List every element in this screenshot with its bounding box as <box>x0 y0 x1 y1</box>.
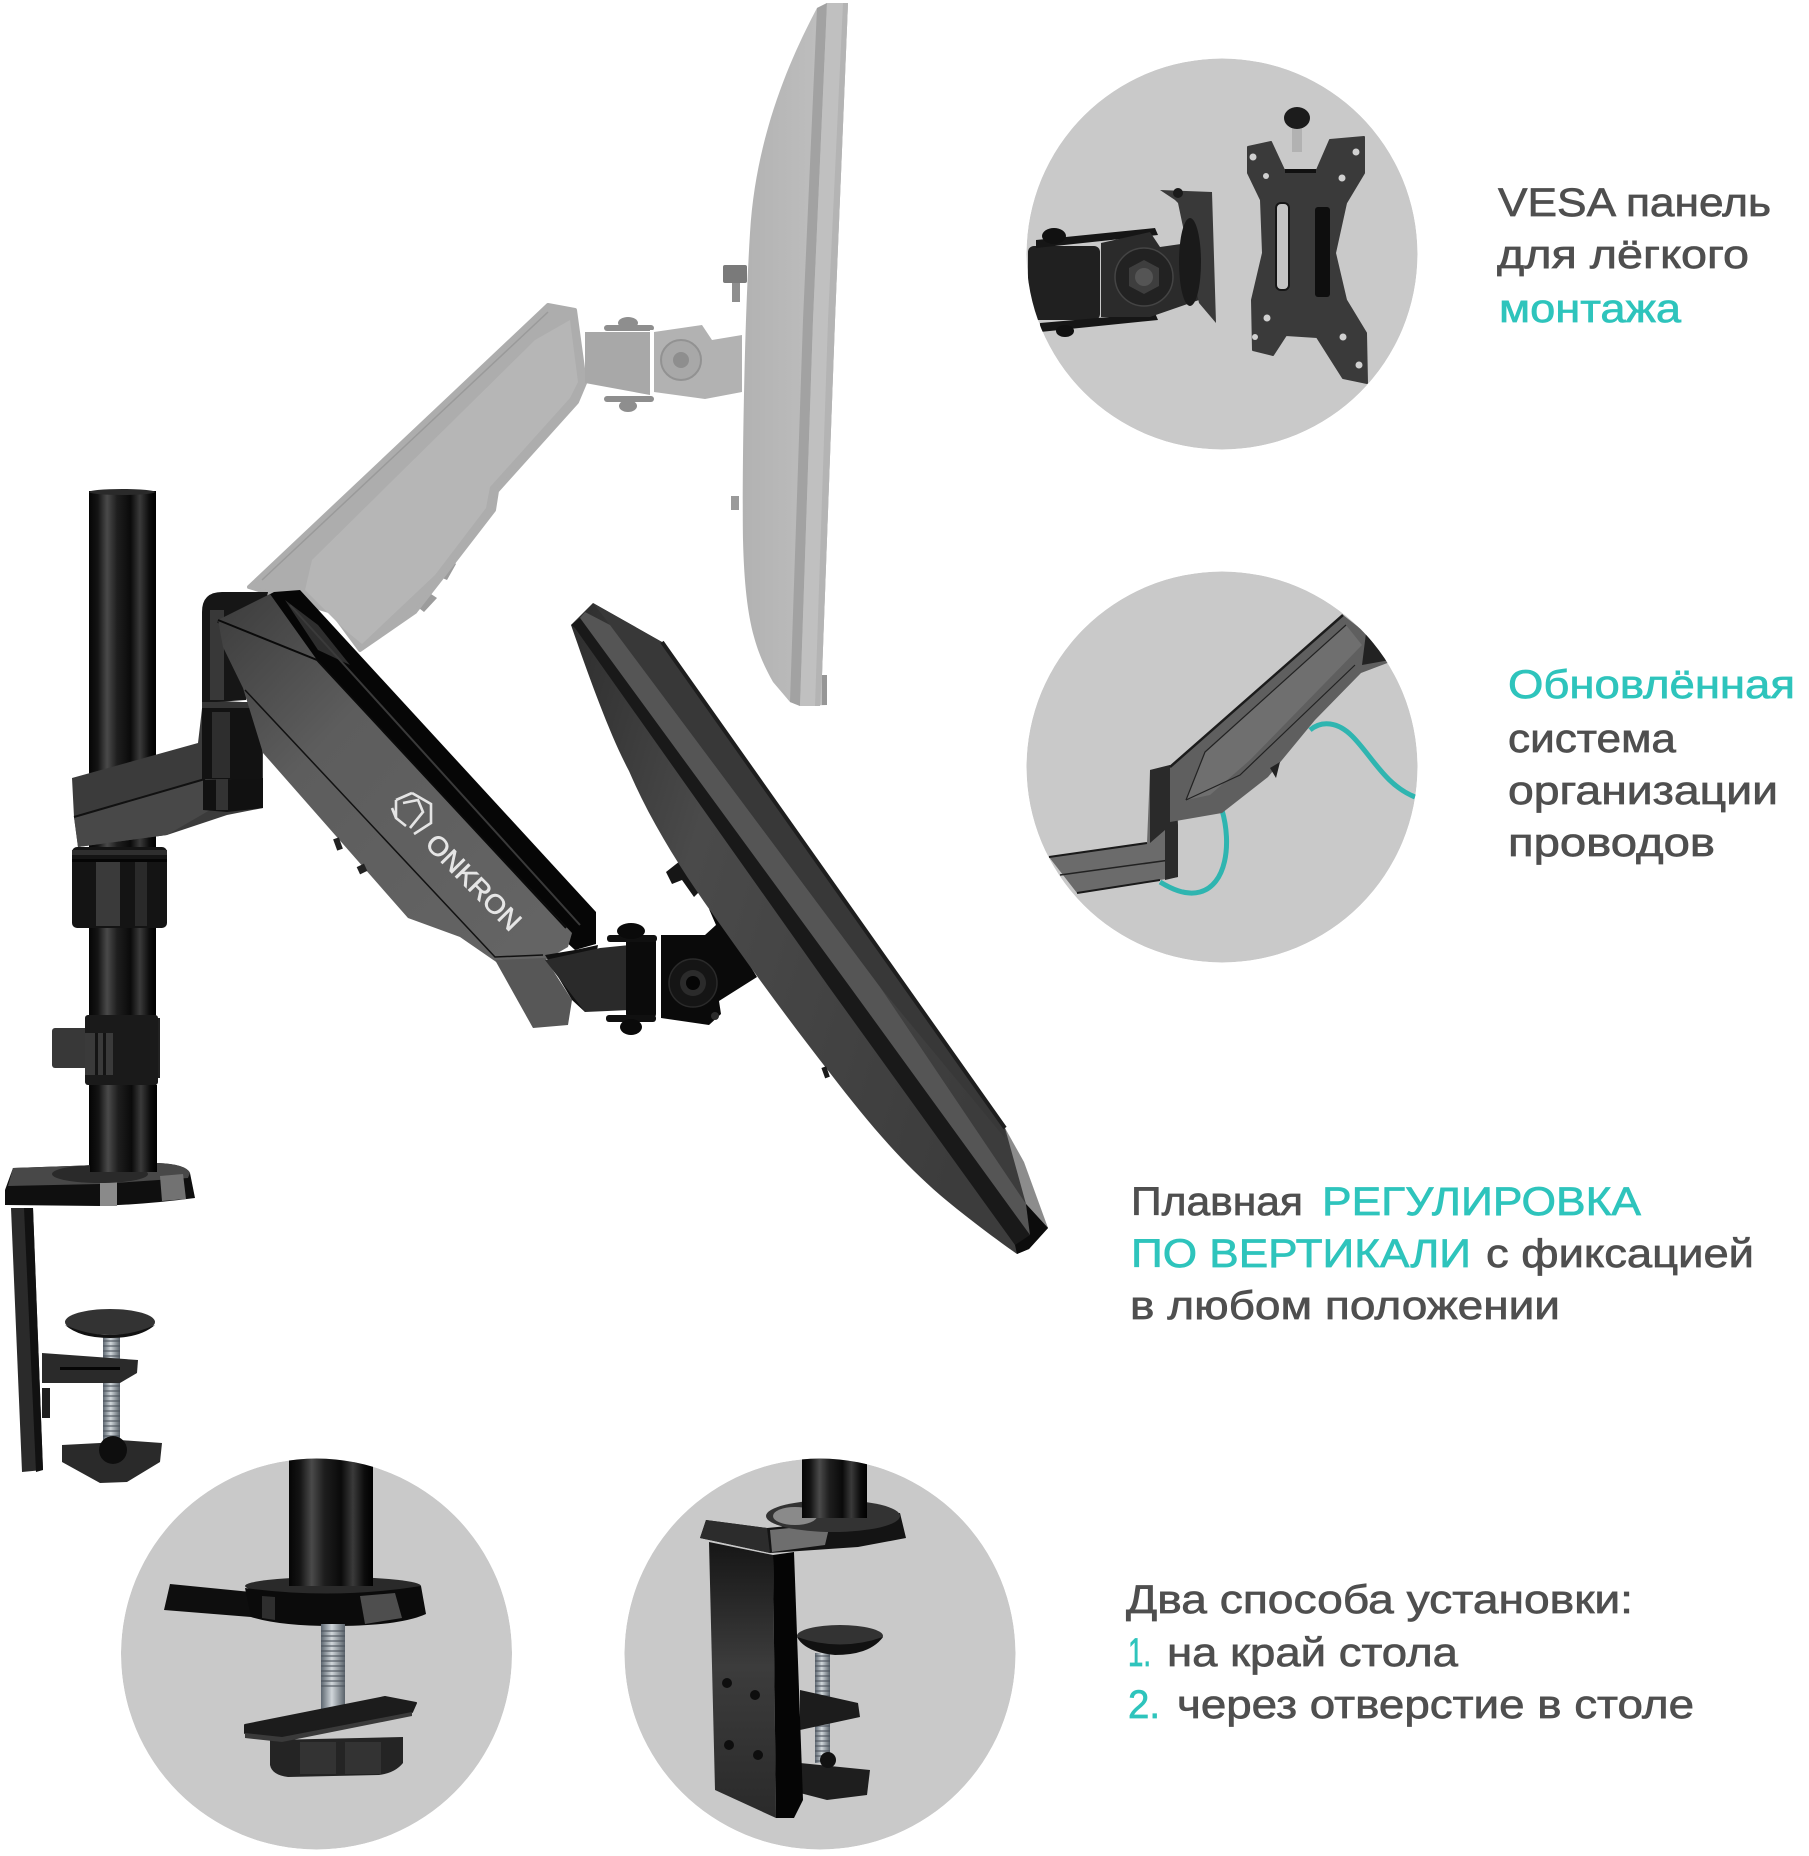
lower swing arm <box>72 700 263 847</box>
icon: lower clamp screw <box>797 1625 883 1800</box>
panel: cable management circle <box>1026 572 1418 962</box>
installation methods caption: через отверстие в столе <box>1177 1683 1694 1727</box>
vertical adjustment caption: ПО ВЕРТИКАЛИ <box>1131 1232 1471 1276</box>
panel: desk-edge clamp circle <box>624 1450 1016 1850</box>
arm lower end piece <box>495 945 598 1028</box>
tilt hinge on dark monitor <box>545 861 757 1035</box>
VESA caption <box>1497 181 1771 331</box>
installation methods caption: на край стола <box>1167 1631 1459 1675</box>
cable management caption: организации <box>1508 769 1778 813</box>
installation methods caption: 1. <box>1128 1631 1151 1675</box>
arm pivot column <box>202 592 268 779</box>
vertical adjustment caption: РЕГУЛИРОВКА <box>1322 1180 1641 1224</box>
cable management caption: Обновлённая <box>1508 663 1795 707</box>
vertical adjustment caption: Плавная <box>1131 1180 1303 1224</box>
clamp pole collar and cable clip <box>52 1015 160 1085</box>
ONKRON logo <box>392 793 527 937</box>
vertical adjustment caption: в любом положении <box>1130 1284 1560 1328</box>
vertical adjustment caption <box>1130 1180 1754 1328</box>
cable management caption <box>1508 663 1795 865</box>
desk pole <box>89 489 156 1191</box>
icon: teal cable <box>1160 724 1415 893</box>
icon: vertical clamp plate <box>709 1542 803 1818</box>
icon: arm hinge <box>1028 188 1216 337</box>
pole collar <box>72 847 167 928</box>
raised gas spring arm: black strip <box>217 590 596 950</box>
cable management caption: система <box>1508 717 1677 761</box>
ONKRON logo: ONKRON <box>420 828 527 937</box>
tension adjusters under arm <box>333 837 367 874</box>
installation methods caption <box>1126 1578 1694 1727</box>
icon: VESA plate with screw <box>1248 107 1367 383</box>
VESA caption: VESA панель <box>1498 181 1771 225</box>
icon: pressure plate and knob <box>245 1697 416 1777</box>
installation methods caption: Два способа установки: <box>1126 1578 1633 1622</box>
ghost monitor in raised position <box>743 3 848 706</box>
icon: arm outline <box>1049 615 1390 893</box>
ghost arm in raised position <box>249 305 585 650</box>
installation methods caption: 2. <box>1128 1683 1160 1727</box>
gas spring arm: grey side panel <box>218 594 572 966</box>
ghost tilt hinge <box>585 265 747 510</box>
cable management caption: проводов <box>1508 821 1715 865</box>
VESA caption: монтажа <box>1499 287 1682 331</box>
panel: through-hole mount circle <box>121 1450 512 1850</box>
vertical adjustment caption: с фиксацией <box>1486 1232 1754 1276</box>
small desk clamp <box>5 1085 195 1483</box>
panel: VESA detail circle <box>1026 58 1418 450</box>
VESA caption: для лёгкого <box>1497 233 1749 277</box>
icon: pole and base <box>164 1450 426 1626</box>
dark monitor in tilted position <box>571 603 1048 1254</box>
icon: threaded screw <box>321 1624 345 1714</box>
icon: clamp top and pole <box>700 1450 906 1553</box>
